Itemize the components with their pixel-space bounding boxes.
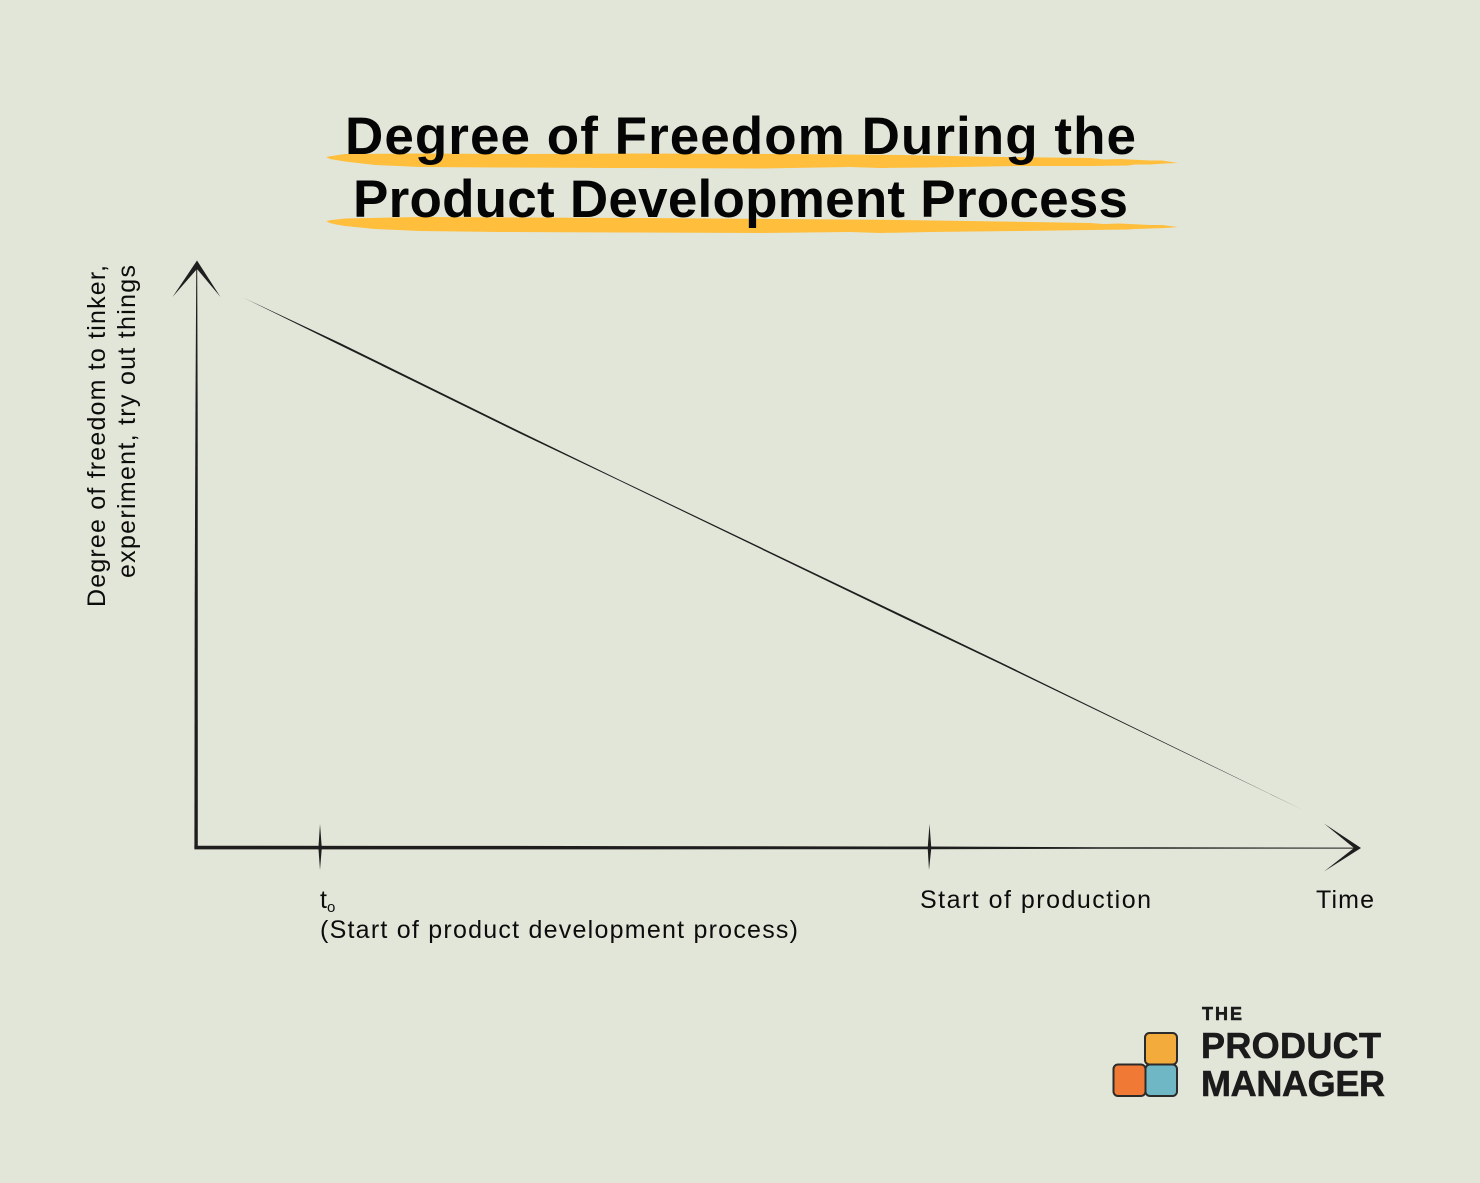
- title: Product Development Process: [353, 170, 1128, 229]
- y axis label: experiment, try out things: [113, 265, 141, 578]
- logo wordmark: MANAGER: [1201, 1063, 1385, 1104]
- label: t0 start of product development process: [320, 886, 798, 944]
- label: t0 start of product development process: o: [327, 899, 335, 916]
- label: t0 start of product development process: t: [320, 886, 327, 914]
- logo wordmark: [1201, 1004, 1385, 1104]
- x axis arrow: [194, 824, 1361, 872]
- y axis arrow: [172, 260, 220, 848]
- icon: stacked blocks: [1114, 1033, 1177, 1096]
- label: t0 start of product development process: (Start of product development process): [320, 916, 798, 944]
- y axis label: [83, 265, 141, 607]
- logo: The Product Manager: [1114, 1004, 1385, 1104]
- brush highlight: title line 1: [326, 154, 1178, 168]
- title: [345, 107, 1136, 229]
- tick: t0: [318, 824, 322, 870]
- logo wordmark: THE: [1202, 1004, 1242, 1024]
- y axis label: Degree of freedom to tinker,: [83, 265, 111, 607]
- declining freedom line: [243, 298, 1303, 810]
- tick: start of production: [928, 824, 931, 870]
- label: start of production: Start of production: [920, 886, 1151, 914]
- label: time: Time: [1316, 886, 1374, 914]
- logo wordmark: PRODUCT: [1201, 1025, 1381, 1066]
- title: Degree of Freedom During the: [345, 107, 1136, 166]
- brush highlight: title line 2: [326, 217, 1178, 233]
